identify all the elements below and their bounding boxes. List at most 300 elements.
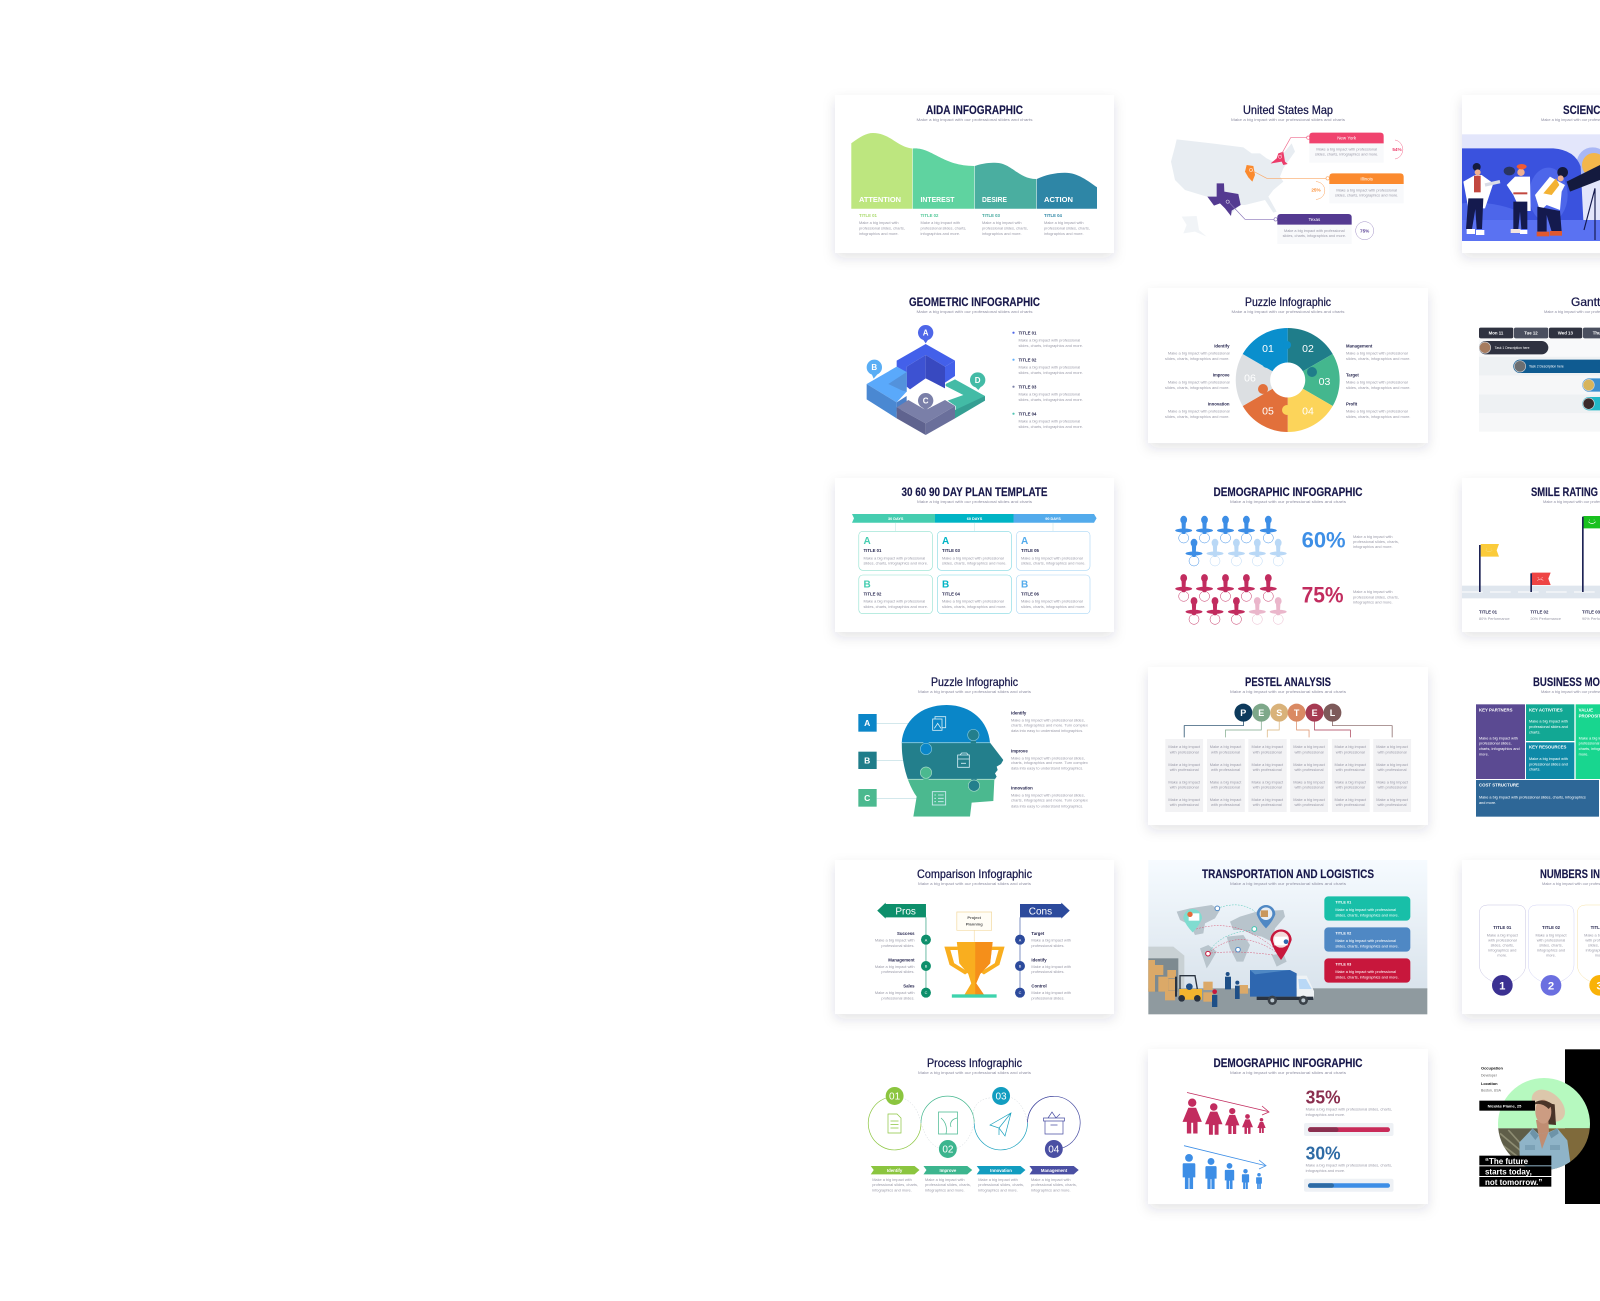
subtitle: plan: Make a big impact with our professional slides and charts [917, 499, 1032, 504]
text: cons: Make a big impact with [1031, 990, 1071, 995]
list: geometric: Make a big impact with professional [1018, 392, 1080, 396]
subtitle: demographic: Make a big impact with our professional slides and charts [1230, 499, 1346, 504]
panel: puzzle ring infographic [1148, 288, 1428, 443]
chart: AIDA wave funnel: DESIRE [982, 195, 1007, 204]
PESTEL letters: T [1294, 708, 1300, 718]
value: 75 percent: 75% [1302, 583, 1344, 608]
table: business model blocks: professional slides and [1529, 762, 1568, 766]
PESTEL table text: with professional [1295, 802, 1324, 807]
PESTEL letters: E [1258, 708, 1264, 718]
text: cons: professional slides. [1031, 943, 1064, 948]
title: plan: 30 60 90 DAY PLAN TEMPLATE [902, 485, 1048, 499]
text: pros: Make a big impact with [875, 990, 914, 995]
badge numbers [889, 1092, 1060, 1156]
labels: puzzle ring left: Make a big impact with professional [1168, 351, 1230, 356]
chart: Gantt rows and bars: Task 1 Description here [1495, 346, 1530, 350]
PESTEL table text: with professional [1170, 802, 1199, 807]
text: 75 percent: professional slides, charts, [1353, 594, 1399, 600]
badge numbers: 02 [942, 1144, 954, 1156]
panel: business model canvas [1476, 675, 1600, 817]
subtitle: process: Make a big impact with our professional slides and charts [918, 1070, 1031, 1075]
title: demographic: DEMOGRAPHIC INFOGRAPHIC [1214, 485, 1363, 499]
chart: six piece puzzle ring [1236, 328, 1340, 432]
plan cards: Make a big impact with professional [942, 555, 1004, 560]
icons: process [888, 1112, 1064, 1136]
table: business model blocks: Make a big impact with professional slides, charts, infographics [1479, 796, 1586, 800]
table: business model blocks: KEY RESOURCES [1529, 745, 1567, 750]
text blocks: head: charts, infographics and more. Turn complex [1011, 723, 1088, 728]
map and callouts: Make a big impact with professional [1284, 229, 1345, 233]
text blocks: head: data into easy to understand infographics. [1011, 728, 1083, 733]
table: business model blocks [1476, 704, 1600, 817]
step text: infographics and more. [978, 1188, 1018, 1192]
chart: AIDA wave funnel: INTEREST [920, 195, 955, 204]
step text: infographics and more. [925, 1188, 965, 1192]
arrow labels: Identify [887, 1168, 903, 1173]
table: business model blocks: professional slides, [1479, 742, 1512, 746]
list: geometric: TITLE 04 [1018, 412, 1037, 416]
step text: Make a big impact with [872, 1177, 912, 1182]
PESTEL table text: Make a big impact [1252, 744, 1284, 749]
panel: PESTEL analysis [1148, 667, 1428, 825]
panel: geometric infographic [867, 295, 1083, 435]
map and callouts [1171, 133, 1404, 244]
PESTEL table text: with professional [1170, 750, 1199, 754]
PESTEL table text: Make a big impact [1252, 780, 1284, 784]
text: pros [875, 931, 915, 1000]
chart: flags on road: TITLE 02 [1530, 609, 1549, 614]
title: process: Process Infographic [927, 1056, 1022, 1070]
text columns: AIDA: professional slides, charts, [920, 226, 966, 230]
scene: profile portrait: Location [1481, 1081, 1498, 1086]
chart: Gantt rows and bars [1479, 328, 1600, 432]
PESTEL table text: Make a big impact [1293, 744, 1326, 749]
text columns: AIDA: Make a big impact with [982, 220, 1022, 225]
map and callouts: Texas [1308, 217, 1321, 222]
PESTEL table text: Make a big impact [1168, 744, 1201, 749]
subtitle: AIDA: Make a big impact with our professional slides and charts [916, 117, 1033, 122]
table: business model blocks: charts. [1529, 768, 1540, 772]
panel: profile quote [1479, 1049, 1600, 1204]
map and callouts: Make a big impact with professional [1336, 188, 1397, 192]
map and callouts: 75% [1360, 228, 1370, 233]
stat: 35 percent: infographics and more. [1306, 1112, 1345, 1117]
cards: numbered shields: Make a big impact [1535, 933, 1567, 937]
text blocks: head: Identify [1011, 711, 1027, 716]
text columns: AIDA: Make a big impact with [920, 220, 960, 225]
chart: six piece puzzle ring: 03 [1319, 376, 1330, 388]
PESTEL letters [1240, 708, 1336, 718]
table: business model blocks: Make a big impact with [1529, 720, 1568, 724]
scene: logistics illustration: TITLE 03 [1335, 963, 1351, 967]
icons on head pieces [932, 717, 969, 805]
scene: logistics illustration: TITLE 02 [1335, 932, 1351, 936]
text: cons: Make a big impact with [1031, 938, 1071, 942]
scene: profile portrait: “The future [1485, 1157, 1529, 1166]
title: puzzle head: Puzzle Infographic [931, 675, 1018, 689]
PESTEL letters: S [1276, 708, 1282, 718]
square letters: B [864, 756, 870, 766]
icons: female population falling [1182, 1092, 1269, 1135]
PESTEL table text: with professional [1253, 750, 1282, 754]
chart: Gantt rows and bars: Tue 12 [1524, 331, 1538, 336]
table: business model blocks: COST STRUCTURE [1479, 782, 1519, 787]
labels: puzzle ring right: Make a big impact with professional [1346, 409, 1408, 414]
scene: logistics illustration: slides, charts, infographics and more. [1335, 944, 1399, 948]
labels: pros cons: C [1019, 991, 1022, 995]
title: AIDA: AIDA INFOGRAPHIC [926, 103, 1023, 117]
PESTEL table text: Make a big impact [1293, 762, 1326, 767]
list: geometric: Make a big impact with professional [1018, 364, 1080, 370]
cards: numbered shields: more. [1546, 954, 1556, 958]
scene: logistics illustration: slides, charts, infographics and more. [1335, 975, 1399, 979]
map and callouts: Make a big impact with professional [1316, 148, 1377, 152]
plan cards: TITLE 02 [864, 591, 882, 596]
text blocks: head: Make a big impact with professional slides, [1011, 755, 1085, 760]
plan cards: A [942, 536, 949, 547]
title: PESTEL: PESTEL ANALYSIS [1245, 675, 1331, 689]
step text: professional slides, charts, [978, 1182, 1024, 1187]
cards: numbered shields: with professional [1537, 938, 1565, 942]
PESTEL table text: with professional [1336, 750, 1365, 754]
labels: pros cons: B [925, 964, 928, 968]
chart: flags on road: TITLE 03 [1582, 609, 1600, 614]
step text: Make a big impact with [1031, 1177, 1071, 1182]
pictogram: red 75 percent [1175, 574, 1287, 624]
panel: process infographic [868, 1056, 1080, 1192]
scene: profile portrait: Boston, USA [1481, 1089, 1502, 1093]
text columns: AIDA: professional slides, charts, [982, 226, 1028, 230]
cards: numbered shields: TITLE 01 [1493, 925, 1512, 930]
PESTEL table text: with professional [1295, 767, 1324, 772]
text columns: AIDA: professional slides, charts, [859, 226, 905, 230]
labels: puzzle ring left: slides, charts, infographics and more. [1165, 414, 1230, 419]
list: geometric: Make a big impact with professional [1018, 338, 1080, 342]
PESTEL table text: with professional [1170, 784, 1199, 790]
plan cards: B [942, 580, 949, 590]
text blocks: head: Innovation [1011, 786, 1033, 791]
plan cards: slides, charts, infographics and more. [1021, 561, 1085, 566]
table: business model blocks: more. [1479, 752, 1489, 756]
list: geometric: TITLE 02 [1018, 358, 1037, 362]
text columns: AIDA: TITLE 02 [920, 213, 939, 218]
list: geometric [1012, 330, 1083, 429]
plan cards: Make a big impact with professional [864, 555, 925, 560]
step text: infographics and more. [1031, 1188, 1071, 1192]
cards: numbered shields: 1 [1499, 980, 1505, 992]
stat: 35 percent: Make a big impact with professional slides, charts, [1306, 1106, 1392, 1112]
scene: logistics illustration: Make a big impact with professional [1335, 908, 1396, 912]
badge numbers: 03 [995, 1092, 1007, 1102]
chart: AIDA wave funnel: ACTION [1044, 195, 1073, 204]
text columns: AIDA: TITLE 01 [859, 213, 878, 218]
panel: demographic pictogram [1175, 485, 1399, 624]
square letters: A [864, 718, 870, 728]
panel: puzzle head infographic [858, 675, 1088, 819]
text: pros: professional slides. [881, 969, 914, 974]
scene: logistics illustration: TITLE 01 [1335, 901, 1352, 905]
list: geometric: TITLE 01 [1018, 330, 1037, 336]
labels: puzzle ring left: Improve [1213, 373, 1230, 378]
text: pros: Success [897, 931, 915, 936]
title: puzzle ring: Puzzle Infographic [1245, 295, 1331, 309]
PESTEL table text: with professional [1253, 784, 1282, 790]
text columns: AIDA [859, 213, 1090, 236]
PESTEL table text: Make a big impact [1376, 744, 1409, 749]
diagram: process circles [868, 1087, 1080, 1174]
PESTEL table text: Make a big impact [1168, 797, 1201, 802]
scene: logistics illustration [1148, 860, 1427, 1014]
square letters [864, 718, 870, 803]
plan cards: TITLE 06 [1021, 591, 1040, 596]
table: business model blocks: charts, infographics and [1479, 747, 1520, 751]
text: pros: Make a big impact with [875, 938, 914, 942]
table: business model blocks: and more. [1479, 801, 1496, 805]
PESTEL table text: with professional [1295, 784, 1324, 790]
text blocks: head: charts, infographics and more. Turn complex [1011, 798, 1088, 803]
illustration: scientists with telescope [1462, 134, 1600, 241]
pictogram: blue 60 percent [1175, 516, 1287, 566]
scene: profile portrait: Developer [1481, 1074, 1498, 1078]
text: cons: professional slides. [1031, 996, 1064, 1000]
text: pros: professional slides. [881, 996, 914, 1000]
value: 60 percent: 60% [1302, 528, 1346, 553]
plan cards: slides, charts, infographics and more. [942, 604, 1006, 609]
PESTEL table text: Make a big impact [1376, 780, 1409, 784]
subtitle: puzzle ring: Make a big impact with our professional slides and charts [1232, 309, 1345, 314]
PESTEL table text: Make a big impact [1335, 797, 1367, 802]
text: 60 percent [1353, 534, 1399, 549]
table: business model blocks: VALUE [1579, 707, 1593, 712]
timeline arrow band: 30 DAYS [888, 517, 904, 521]
plan cards [859, 531, 1090, 614]
text columns: AIDA: infographics and more. [1044, 231, 1084, 236]
plan cards: TITLE 03 [942, 548, 961, 553]
list: geometric: Make a big impact with professional [1018, 418, 1080, 424]
text: pros: Sales [903, 984, 915, 989]
text: 75 percent: Make a big impact with [1353, 589, 1393, 594]
title: transportation: TRANSPORTATION AND LOGISTICS [1202, 867, 1374, 881]
table: business model blocks: professional slides and [1529, 725, 1568, 729]
cards: numbered shields: infographics and [1488, 948, 1516, 952]
plan cards: B [1021, 580, 1028, 590]
PESTEL table text: Make a big impact [1210, 780, 1242, 784]
chart: six piece puzzle ring: 01 [1262, 343, 1274, 355]
labels: puzzle ring left: Make a big impact with professional [1168, 409, 1230, 414]
labels: pros cons: Pros [895, 906, 916, 918]
diagram: PESTEL connectors and circles [1165, 704, 1411, 812]
chart: flags on road: 20% Performance [1530, 617, 1561, 621]
panel: Gantt chart [1479, 295, 1600, 432]
plan cards: A [864, 536, 871, 547]
labels: puzzle ring right: Target [1346, 373, 1359, 378]
text columns: AIDA: TITLE 03 [982, 213, 1001, 218]
text: pros: Make a big impact with [875, 964, 914, 969]
PESTEL table text: Make a big impact [1168, 780, 1201, 784]
text columns: AIDA: Make a big impact with [1044, 220, 1084, 225]
text: pros: professional slides. [881, 943, 914, 948]
title: Gantt: Gantt [1571, 295, 1600, 309]
plan cards: Make a big impact with professional [864, 599, 925, 604]
labels: puzzle ring right: slides, charts, infographics and more. [1346, 356, 1410, 361]
stat: 30 percent [1304, 1143, 1394, 1192]
icons: male population falling [1183, 1146, 1266, 1189]
table: business model blocks: KEY PARTNERS [1479, 707, 1513, 712]
title: geometric: GEOMETRIC INFOGRAPHIC [909, 295, 1040, 309]
plan cards: Make a big impact with professional [1021, 555, 1083, 560]
arrow labels: Innovation [990, 1168, 1012, 1173]
marker letters: D [975, 376, 981, 385]
plan cards: slides, charts, infographics and more. [864, 561, 928, 566]
PESTEL table text: with professional [1211, 767, 1240, 772]
timeline arrow band: 60 DAYS [967, 517, 983, 521]
PESTEL table text: with professional [1378, 802, 1407, 807]
chart: flags on road: 80% Performance [1479, 617, 1510, 621]
PESTEL table text: with professional [1253, 767, 1282, 772]
scene: logistics illustration: Make a big impact with professional [1335, 939, 1396, 943]
subtitle: puzzle head: Make a big impact with our professional slides and charts [918, 689, 1031, 694]
text: pros: Management [888, 957, 915, 962]
labels: pros cons: A [1019, 938, 1022, 942]
PESTEL table text: Make a big impact [1210, 744, 1242, 749]
list: geometric: TITLE 03 [1018, 384, 1037, 390]
labels: puzzle ring right [1346, 344, 1410, 419]
cards: numbered shields: infographics and [1537, 948, 1565, 952]
PESTEL letters: E [1312, 708, 1318, 718]
plan cards: slides, charts, infographics and more. [864, 604, 928, 609]
chart: six piece puzzle ring: 05 [1262, 406, 1274, 418]
timeline arrow band: 90 DAYS [1045, 517, 1061, 521]
scene: logistics illustration: slides, charts, infographics and more. [1335, 913, 1399, 917]
PESTEL table text: with professional [1170, 767, 1199, 772]
scene: profile portrait: Nicolás Plame, 25 [1488, 1103, 1522, 1108]
labels: puzzle ring left: slides, charts, infographics and more. [1165, 356, 1230, 361]
stat: 30 percent: 30% [1306, 1143, 1341, 1163]
PESTEL table text: with professional [1378, 767, 1407, 772]
step text: infographics and more. [872, 1188, 912, 1192]
PESTEL table text: Make a big impact [1210, 762, 1242, 767]
labels: puzzle ring left [1165, 344, 1230, 419]
PESTEL table text: with professional [1211, 802, 1240, 807]
text blocks: head [1011, 711, 1088, 808]
chart: Gantt rows and bars: Mon 11 [1489, 331, 1504, 336]
chart: AIDA wave funnel [851, 133, 1097, 209]
PESTEL letters: L [1330, 708, 1336, 718]
map and callouts: Illinois [1360, 176, 1374, 181]
stat: 30 percent: Make a big impact with professional slides, charts, [1306, 1162, 1392, 1168]
labels: puzzle ring right: Management [1346, 344, 1373, 349]
chart: flags on road: TITLE 01 [1479, 609, 1498, 614]
table: business model blocks: more. [1579, 752, 1588, 756]
text blocks: head: charts, infographics and more. Turn complex [1011, 760, 1088, 765]
text: 60 percent: infographics and more. [1353, 544, 1393, 549]
PESTEL table text: Make a big impact [1335, 762, 1367, 767]
labels: pros cons: B [1019, 964, 1022, 968]
PESTEL letters: P [1240, 708, 1246, 718]
text columns: AIDA: TITLE 04 [1044, 213, 1063, 218]
subtitle: PESTEL: Make a big impact with our professional slides and charts [1230, 689, 1346, 694]
panel: smile rating [1462, 478, 1600, 632]
text: cons: Control [1031, 984, 1047, 989]
chart: six piece puzzle ring: 04 [1302, 406, 1314, 418]
title: demographic bars: DEMOGRAPHIC INFOGRAPHIC [1214, 1056, 1363, 1070]
stat: 35 percent: 35% [1306, 1087, 1341, 1107]
PESTEL table text: Make a big impact [1252, 762, 1284, 767]
text: cons: Make a big impact with [1031, 964, 1071, 969]
table: business model blocks: charts. [1529, 730, 1540, 734]
PESTEL table text: with professional [1295, 750, 1324, 754]
cards: numbered shields: slides, charts, [1491, 943, 1514, 947]
panel: United States map [1171, 103, 1404, 244]
scene: profile portrait: not tomorrow.” [1485, 1178, 1542, 1187]
cards: numbered shields: slides, charts, [1539, 943, 1563, 947]
scene: profile portrait: Occupation [1481, 1066, 1503, 1071]
labels: puzzle ring left: Identify [1214, 344, 1230, 349]
square letters: C [864, 793, 870, 803]
text columns: AIDA: Make a big impact with [859, 220, 899, 225]
marker letters [871, 329, 981, 406]
text: 60 percent: professional slides, charts, [1353, 539, 1399, 544]
text: 60 percent: Make a big impact with [1353, 534, 1393, 539]
list: geometric: slides, charts, infographics and more. [1018, 343, 1083, 348]
text columns: AIDA: infographics and more. [920, 231, 960, 236]
plan cards: B [864, 580, 871, 590]
PESTEL table text: with professional [1378, 750, 1407, 754]
scene: logistics illustration: Make a big impact with professional [1335, 970, 1396, 974]
chart: flags on road [1462, 516, 1600, 621]
marker letters: B [871, 363, 877, 372]
PESTEL table text: with professional [1211, 784, 1240, 790]
labels: pros cons: Cons [1029, 906, 1052, 918]
PESTEL table text: with professional [1378, 784, 1407, 790]
label: project planning [966, 915, 983, 926]
map and callouts: 54% [1392, 147, 1403, 152]
panel: transportation and logistics [1148, 860, 1427, 1014]
text blocks: head: Make a big impact with professional slides, [1011, 718, 1085, 723]
panel: AIDA infographic [835, 95, 1114, 253]
text blocks: head: data into easy to understand infographics. [1011, 766, 1083, 771]
labels: puzzle ring left: slides, charts, infographics and more. [1165, 385, 1230, 390]
title: comparison: Comparison Infographic [917, 867, 1032, 881]
plan cards: TITLE 05 [1021, 548, 1040, 553]
chart: AIDA wave funnel: ATTENTION [859, 195, 901, 204]
cards: numbered shields: TITLE 02 [1542, 925, 1561, 930]
PESTEL table text: Make a big impact [1335, 780, 1367, 784]
panel: science illustration [1462, 95, 1600, 253]
step text [872, 1177, 1077, 1192]
labels: puzzle ring right: Make a big impact with professional [1346, 380, 1408, 385]
chart: six piece puzzle ring: 06 [1244, 372, 1256, 384]
text: cons: Target [1031, 931, 1045, 936]
plan cards: Make a big impact with professional [942, 599, 1004, 604]
title: US map: United States Map [1243, 103, 1333, 117]
text columns: AIDA: infographics and more. [859, 231, 899, 236]
badge numbers: 04 [1048, 1144, 1060, 1156]
marker letters: A [923, 329, 929, 338]
labels: puzzle ring right: Profit [1346, 402, 1358, 407]
scene: profile portrait [1479, 1049, 1600, 1204]
plan cards: TITLE 01 [864, 548, 882, 553]
map and callouts: slides, charts, infographics and more. [1335, 193, 1398, 197]
chart: Gantt rows and bars: Task 2 Description here [1529, 365, 1564, 369]
arrow labels: Management [1041, 1168, 1068, 1173]
panel: 30 60 90 day plan [835, 478, 1114, 632]
table: business model blocks: Make a big impact with [1529, 757, 1568, 761]
panel: comparison infographic [835, 860, 1114, 1014]
text blocks: head: data into easy to understand infographics. [1011, 803, 1083, 808]
label: project planning: Project [967, 915, 982, 920]
text: 75 percent: infographics and more. [1353, 600, 1393, 604]
